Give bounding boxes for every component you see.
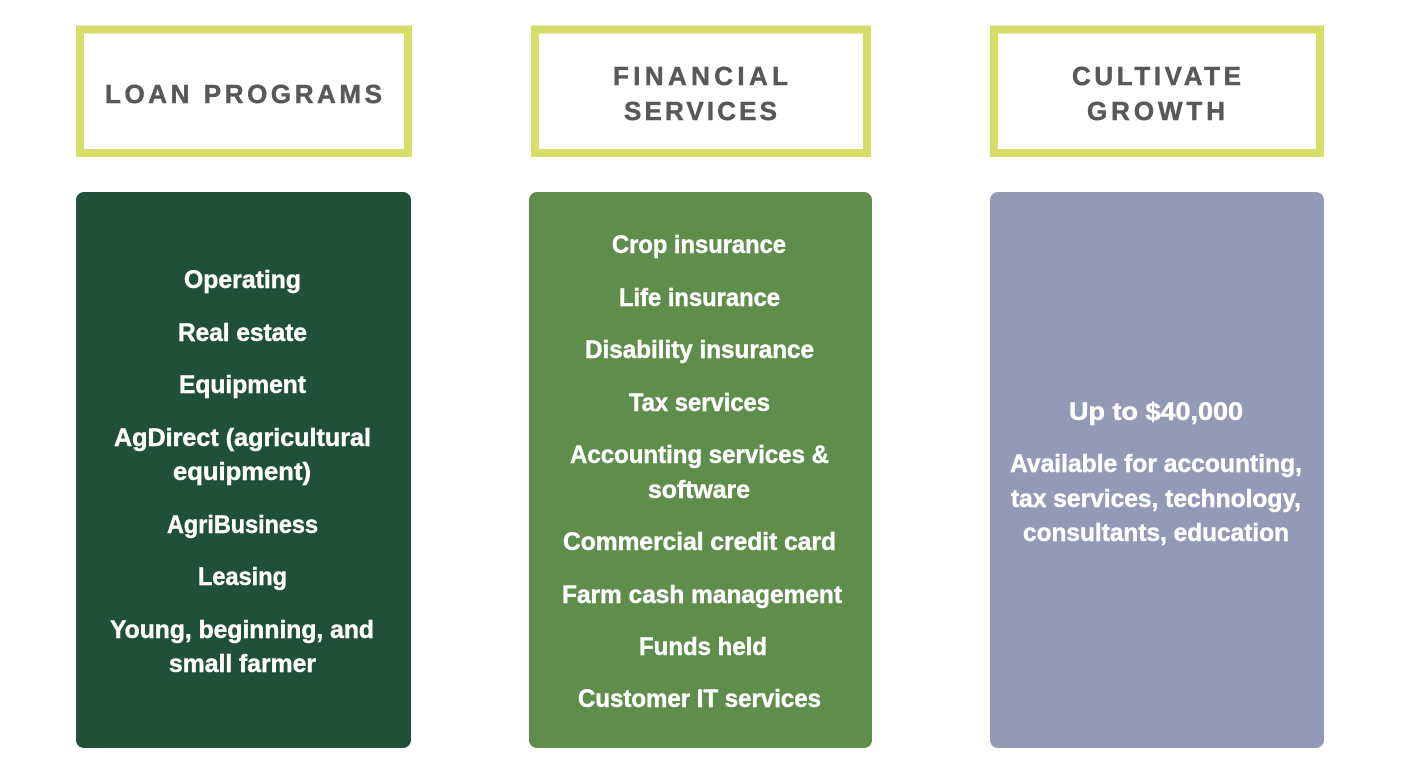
panel: loan programs: small farmer [169, 650, 316, 678]
panel: loan programs: equipment) [173, 458, 311, 486]
heading box: cultivate growth: GROWTH [1087, 96, 1225, 126]
panel: financial services: Funds held [639, 633, 767, 661]
heading box: loan programs: LOAN PROGRAMS [105, 79, 382, 109]
panel: cultivate growth: consultants, education [1023, 519, 1289, 547]
panel: loan programs: AgDirect (agricultural [114, 424, 371, 452]
heading box: cultivate growth [994, 30, 1320, 153]
panel: loan programs: Equipment [179, 371, 307, 399]
heading box: financial services: SERVICES [624, 96, 777, 126]
panel: loan programs: AgriBusiness [167, 511, 318, 539]
panel: cultivate growth: tax services, technology, [1011, 485, 1301, 513]
panel: cultivate growth: Available for accounting, [1010, 450, 1302, 478]
heading box: financial services: FINANCIAL [613, 61, 788, 91]
panel: financial services: Life insurance [619, 284, 780, 312]
panel: cultivate growth [990, 192, 1324, 748]
panel: cultivate growth: Up to $40,000 [1069, 398, 1243, 426]
panel: financial services [529, 192, 872, 748]
panel: loan programs: Real estate [178, 319, 307, 347]
panel: financial services: Tax services [629, 389, 770, 417]
panel: loan programs [76, 192, 411, 748]
panel: loan programs: Leasing [198, 563, 287, 591]
panel: financial services: Customer IT services [578, 685, 821, 713]
panel: financial services: Accounting services & [570, 441, 829, 469]
heading box: loan programs [80, 30, 408, 153]
panel: financial services: Crop insurance [612, 231, 786, 259]
panel: financial services: Farm cash management [562, 581, 843, 609]
heading box: financial services [535, 30, 867, 153]
heading box: cultivate growth: CULTIVATE [1072, 61, 1241, 91]
panel: loan programs: Young, beginning, and [110, 616, 374, 644]
panel: financial services: Disability insurance [585, 336, 814, 364]
panel: financial services: Commercial credit card [563, 528, 836, 556]
panel: loan programs: Operating [184, 266, 301, 294]
panel: financial services: software [648, 476, 750, 504]
